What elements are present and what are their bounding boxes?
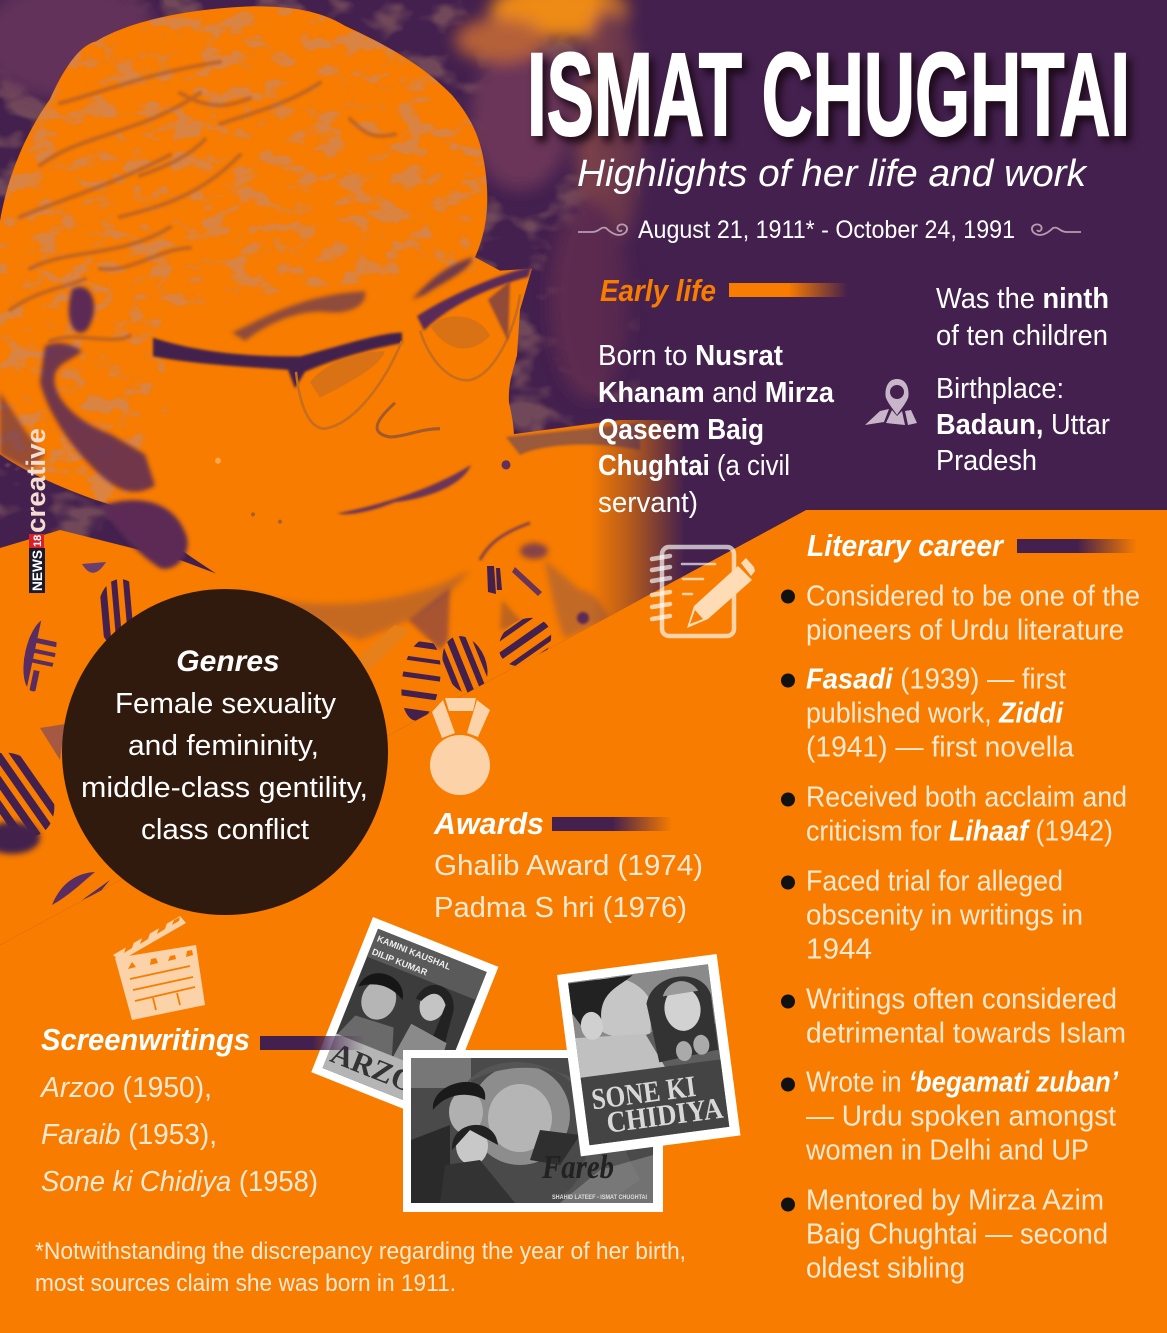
- icon: map pin: [865, 379, 917, 425]
- panel: early life: [598, 273, 1110, 519]
- panel: genres circle: Female sexuality: [115, 688, 336, 720]
- hair texture: [0, 0, 490, 516]
- footnote: *Notwithstanding the discrepancy regarding the year of her birth,: [35, 1238, 686, 1265]
- News18 Creative logo: [21, 428, 51, 593]
- icon: clapperboard: [113, 916, 205, 1020]
- text: awards list: [434, 850, 703, 924]
- panel: literary career: [781, 528, 1140, 1284]
- text: awards list: Ghalib Award (1974): [434, 850, 703, 882]
- News18 Creative logo: 18: [32, 535, 44, 547]
- dates with ornaments: August 21, 1911* - October 24, 1991: [638, 216, 1015, 244]
- subtitle: Highlights of her life and work: [577, 153, 1088, 195]
- text: ninth child: Was the ninth: [936, 283, 1109, 315]
- bullet list: — Urdu spoken amongst: [806, 1100, 1116, 1132]
- neck shading: [276, 570, 468, 670]
- bullet list: detrimental towards Islam: [806, 1018, 1126, 1050]
- poster: Arzoo: ARZOO: [326, 1037, 442, 1109]
- hand: [480, 423, 640, 638]
- poster: Arzoo: [311, 917, 498, 1122]
- text: parents: [598, 340, 835, 519]
- text: birthplace: Birthplace:: [936, 373, 1064, 405]
- ornament left: [578, 224, 1081, 235]
- bullet list: Wrote in ‘begamati zuban’: [806, 1066, 1119, 1098]
- bullet list: 1944: [806, 934, 872, 966]
- glasses and brows: [153, 257, 532, 429]
- blouse and hand base: [0, 420, 700, 945]
- text: birthplace: Pradesh: [936, 445, 1037, 477]
- text: birthplace: [936, 373, 1110, 477]
- footnote: [35, 1238, 686, 1297]
- text: film list: Arzoo (1950),: [39, 1072, 212, 1104]
- poster: Arzoo: DILIP KUMAR: [370, 947, 429, 978]
- face and hair: [0, 0, 532, 605]
- heading: literary career: [807, 528, 1137, 563]
- bullet list: Baig Chughtai — second: [806, 1218, 1108, 1250]
- bullet list: Fasadi (1939) — first: [806, 664, 1066, 696]
- poster: Fareb: Fareb: [541, 1149, 614, 1186]
- panel: genres circle: class conflict: [141, 814, 309, 846]
- icon: notebook and pencil: [652, 547, 755, 636]
- poster: Arzoo: KAMINI KAUSHAL: [376, 934, 453, 972]
- bullet list: Received both acclaim and: [806, 782, 1127, 814]
- icon: medal: [430, 698, 490, 795]
- text: ninth child: of ten children: [936, 320, 1108, 352]
- poster: Sone ki Chidiya: [557, 954, 741, 1156]
- heading: awards: Awards: [433, 806, 544, 841]
- poster: Fareb: SHAHID LATEEF - ISMAT CHUGHTAI: [552, 1195, 647, 1201]
- bullet list: Considered to be one of the: [806, 580, 1140, 612]
- bullet list: women in Delhi and UP: [805, 1134, 1089, 1166]
- text: film list: Sone ki Chidiya (1958): [41, 1166, 318, 1198]
- poster: Sone ki Chidiya: SONE KI: [589, 1070, 698, 1116]
- bullet list: [781, 580, 1140, 1284]
- heading bar: screenwritings: [260, 1036, 365, 1050]
- poster: Sone ki Chidiya: CHIDIYA: [605, 1092, 725, 1140]
- bullet list: criticism for Lihaaf (1942): [806, 816, 1113, 848]
- text: parents: Chughtai (a civil: [598, 450, 790, 482]
- panel: genres circle: [62, 589, 388, 915]
- News18 Creative logo: creative: [21, 428, 51, 533]
- text: parents: Born to Nusrat: [598, 340, 783, 372]
- panel: genres circle: middle-class gentility,: [81, 772, 368, 804]
- right fade into purple: [590, 0, 685, 640]
- text: parents: servant): [598, 487, 698, 519]
- portrait photo panel: [0, 0, 1167, 945]
- heading: early life: Early life: [600, 273, 716, 308]
- text: ninth child: [936, 283, 1109, 352]
- blouse striped buttons: [0, 562, 562, 905]
- panel: awards: [433, 806, 703, 924]
- bullet list: pioneers of Urdu literature: [806, 614, 1124, 646]
- nose and mouth: [215, 403, 510, 524]
- heading: early life: [600, 273, 848, 308]
- bullet list: Writings often considered: [806, 984, 1117, 1016]
- heading: screenwritings: Screenwritings: [41, 1022, 250, 1057]
- bullet list: Faced trial for alleged: [806, 866, 1063, 898]
- text: film list: [39, 1072, 318, 1198]
- bullet list: oldest sibling: [806, 1252, 965, 1284]
- panel: screenwritings: [39, 1022, 318, 1198]
- bullet list: (1941) — first novella: [806, 732, 1075, 764]
- text: parents: Qaseem Baig: [598, 414, 764, 446]
- text: film list: Faraib (1953),: [41, 1119, 217, 1151]
- panel: genres circle: and femininity,: [128, 730, 319, 762]
- bullet list: obscenity in writings in: [806, 900, 1083, 932]
- text: parents: Khanam and Mirza: [598, 377, 835, 409]
- poster: Fareb: [403, 1050, 663, 1212]
- hair shadows: [0, 287, 188, 569]
- bullet list: Mentored by Mirza Azim: [806, 1184, 1104, 1216]
- heading: literary career: Literary career: [807, 528, 1005, 563]
- text: awards list: Padma S hri (1976): [434, 892, 687, 924]
- text: birthplace: Badaun, Uttar: [936, 409, 1110, 441]
- bullet list: published work, Ziddi: [806, 698, 1064, 730]
- News18 Creative logo: NEWS: [29, 550, 45, 591]
- panel: genres circle: Genres: [176, 645, 280, 678]
- footnote: most sources claim she was born in 1911.: [35, 1270, 456, 1297]
- heading: awards: [433, 806, 672, 841]
